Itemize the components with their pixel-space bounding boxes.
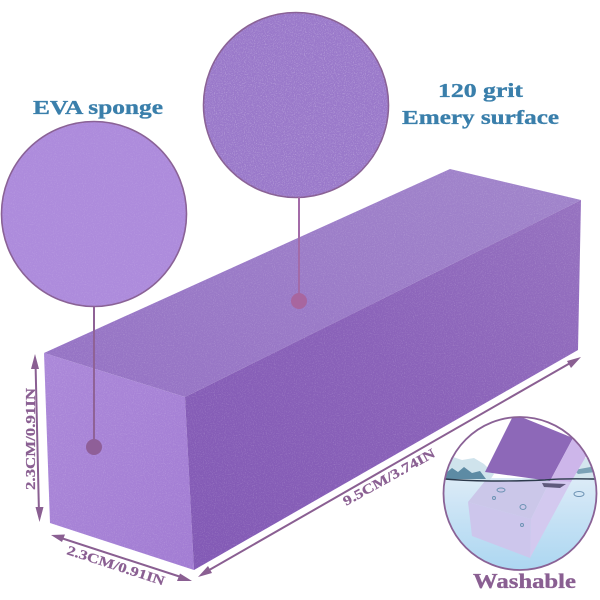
waterline xyxy=(445,479,597,481)
label: width 2.3CM/0.91IN: 2.3CM/0.91IN xyxy=(65,543,167,588)
label: length 9.5CM/3.74IN: 9.5CM/3.74IN xyxy=(340,445,438,509)
block top face xyxy=(44,169,581,397)
arrow: length dimension xyxy=(198,357,581,577)
arrow: width dimension xyxy=(51,534,192,581)
bubbles xyxy=(492,488,584,526)
callout circle: washable block in water xyxy=(440,414,600,573)
label: 120 grit Emery surface: Emery surface xyxy=(402,107,559,129)
pointer: EVA sponge line and dot xyxy=(86,306,102,455)
purple sponge block xyxy=(40,165,585,575)
label: 120 grit Emery surface: 120 grit xyxy=(438,80,523,102)
water body xyxy=(440,478,600,573)
block right face xyxy=(185,200,581,570)
label: EVA sponge: EVA sponge xyxy=(33,97,163,119)
label: 120 grit Emery surface xyxy=(402,80,559,129)
arrow: height dimension xyxy=(31,354,44,522)
block front face xyxy=(44,353,194,570)
block side above water xyxy=(550,438,588,482)
block top under water xyxy=(468,481,550,519)
block side under water xyxy=(530,481,571,558)
block top above water xyxy=(485,414,573,481)
callout circle: emery surface texture xyxy=(200,10,392,200)
callout circle: EVA sponge texture xyxy=(0,120,190,310)
block front under water xyxy=(468,502,531,558)
pointer: emery surface line and dot xyxy=(291,197,307,309)
label: height 2.3CM/0.91IN: 2.3CM/0.91IN xyxy=(23,388,38,490)
label: Washable: Washable xyxy=(473,569,576,593)
splash above water xyxy=(444,456,598,480)
